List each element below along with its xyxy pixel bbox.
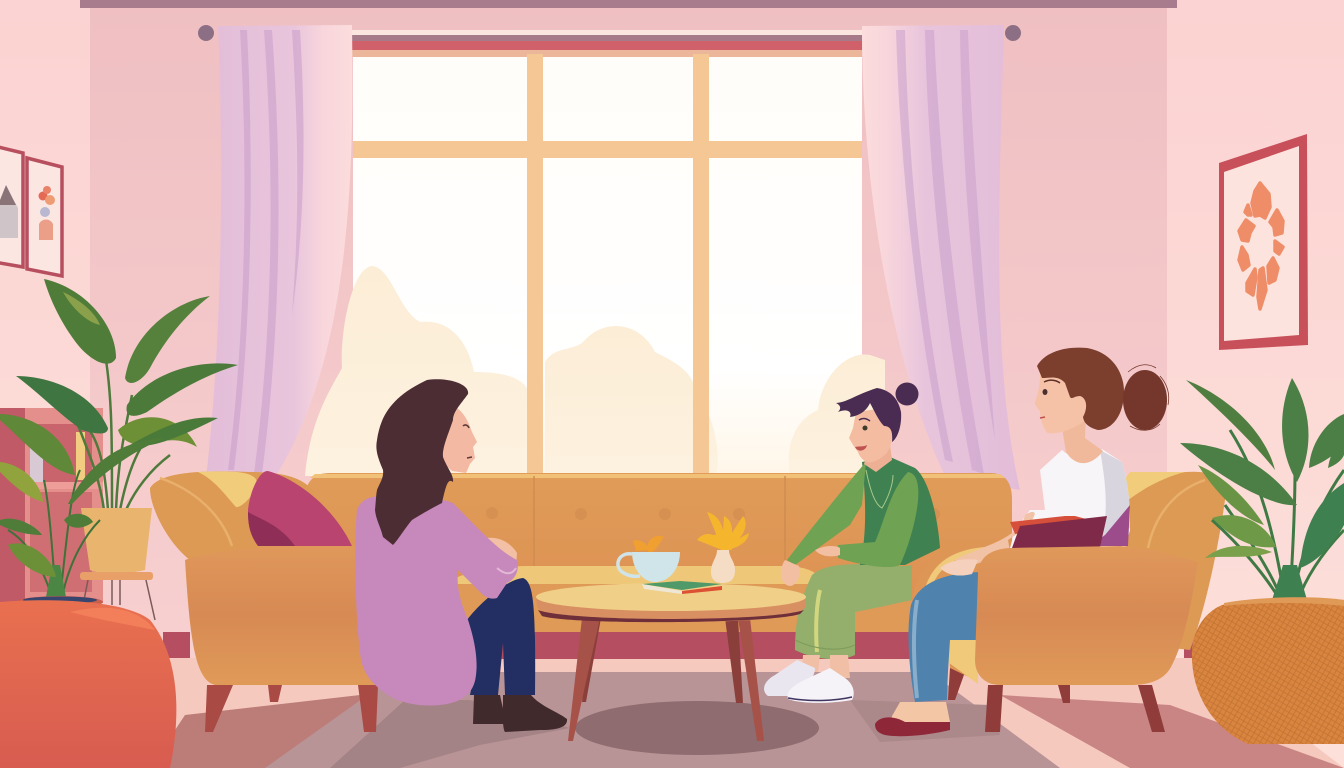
sofa seat cushions — [455, 566, 820, 584]
floor — [150, 632, 1344, 768]
woman: centre in green — [764, 382, 940, 703]
eye and mouth — [463, 425, 472, 458]
ankles — [802, 655, 850, 678]
table shadow — [575, 701, 819, 755]
sweater — [355, 495, 518, 706]
chair legs — [948, 668, 1165, 732]
small plant on pouf — [0, 414, 165, 608]
clouds outside the window — [305, 266, 885, 476]
leaves — [1180, 378, 1344, 600]
hand — [781, 560, 800, 586]
curtain: left — [206, 25, 352, 482]
plant in tan pot on stool — [16, 279, 238, 620]
torso — [860, 456, 940, 565]
flower petals — [1239, 183, 1283, 309]
hand — [940, 559, 978, 576]
book held — [1010, 516, 1107, 548]
arm: left — [787, 462, 866, 565]
woven basket — [1192, 597, 1344, 744]
face — [440, 405, 477, 473]
eye and mouth — [1040, 380, 1060, 418]
woman: right with hair bun — [875, 348, 1169, 736]
chair legs — [205, 685, 378, 732]
stems — [70, 360, 170, 510]
stems — [1212, 430, 1344, 600]
face — [849, 408, 892, 462]
rug shadow — [330, 700, 570, 768]
curtain rod knobs — [198, 25, 1021, 41]
inner arm — [912, 545, 1010, 680]
leaves — [16, 279, 238, 447]
hair — [1037, 348, 1124, 430]
pillow — [248, 471, 352, 546]
face — [1035, 373, 1086, 433]
armchair: left — [150, 471, 380, 732]
hair bun — [1123, 365, 1169, 430]
jeans — [908, 572, 985, 702]
hair — [836, 388, 901, 442]
framed picture: right wall flower — [1219, 134, 1308, 350]
hands — [480, 538, 517, 568]
sandals — [875, 702, 950, 736]
picture: flower print — [27, 158, 62, 276]
stool — [80, 572, 155, 620]
window — [305, 30, 885, 476]
shirt — [1010, 449, 1130, 548]
eye and mouth — [855, 419, 870, 451]
armchair: right, back and legs — [912, 472, 1225, 732]
hair — [375, 379, 468, 545]
chair arm — [185, 545, 380, 685]
table top — [536, 597, 806, 622]
trousers — [795, 564, 912, 659]
chair back — [150, 471, 318, 560]
book on table — [642, 581, 722, 594]
hair bun — [896, 382, 918, 406]
chair back — [1095, 472, 1225, 650]
arm: right — [838, 472, 918, 567]
bookshelf — [0, 408, 103, 603]
tan pot — [81, 508, 152, 573]
window mullions — [353, 54, 862, 476]
large plant in woven basket — [1180, 378, 1344, 744]
woman: back view in lilac — [355, 379, 567, 732]
sofa — [305, 473, 1012, 632]
flower vase — [697, 512, 749, 583]
curtain: right — [862, 25, 1020, 490]
sneakers — [764, 660, 854, 703]
pouf: red-orange — [0, 600, 176, 768]
picture: mountain print — [0, 146, 23, 267]
neck — [1062, 418, 1103, 463]
boots — [473, 695, 567, 732]
neck — [864, 445, 892, 472]
coffee table — [536, 583, 819, 755]
framed pictures: left wall — [0, 146, 62, 276]
arm — [955, 512, 1035, 568]
armchair: right, front arm block — [975, 546, 1198, 685]
legs — [467, 578, 535, 695]
sofa buttons — [486, 507, 940, 520]
rug — [265, 672, 1060, 768]
teacup — [618, 536, 680, 582]
necklace — [866, 470, 893, 508]
baseboard — [475, 632, 912, 659]
saucer — [17, 596, 103, 608]
sofa back — [305, 473, 1012, 632]
table legs — [568, 618, 764, 741]
